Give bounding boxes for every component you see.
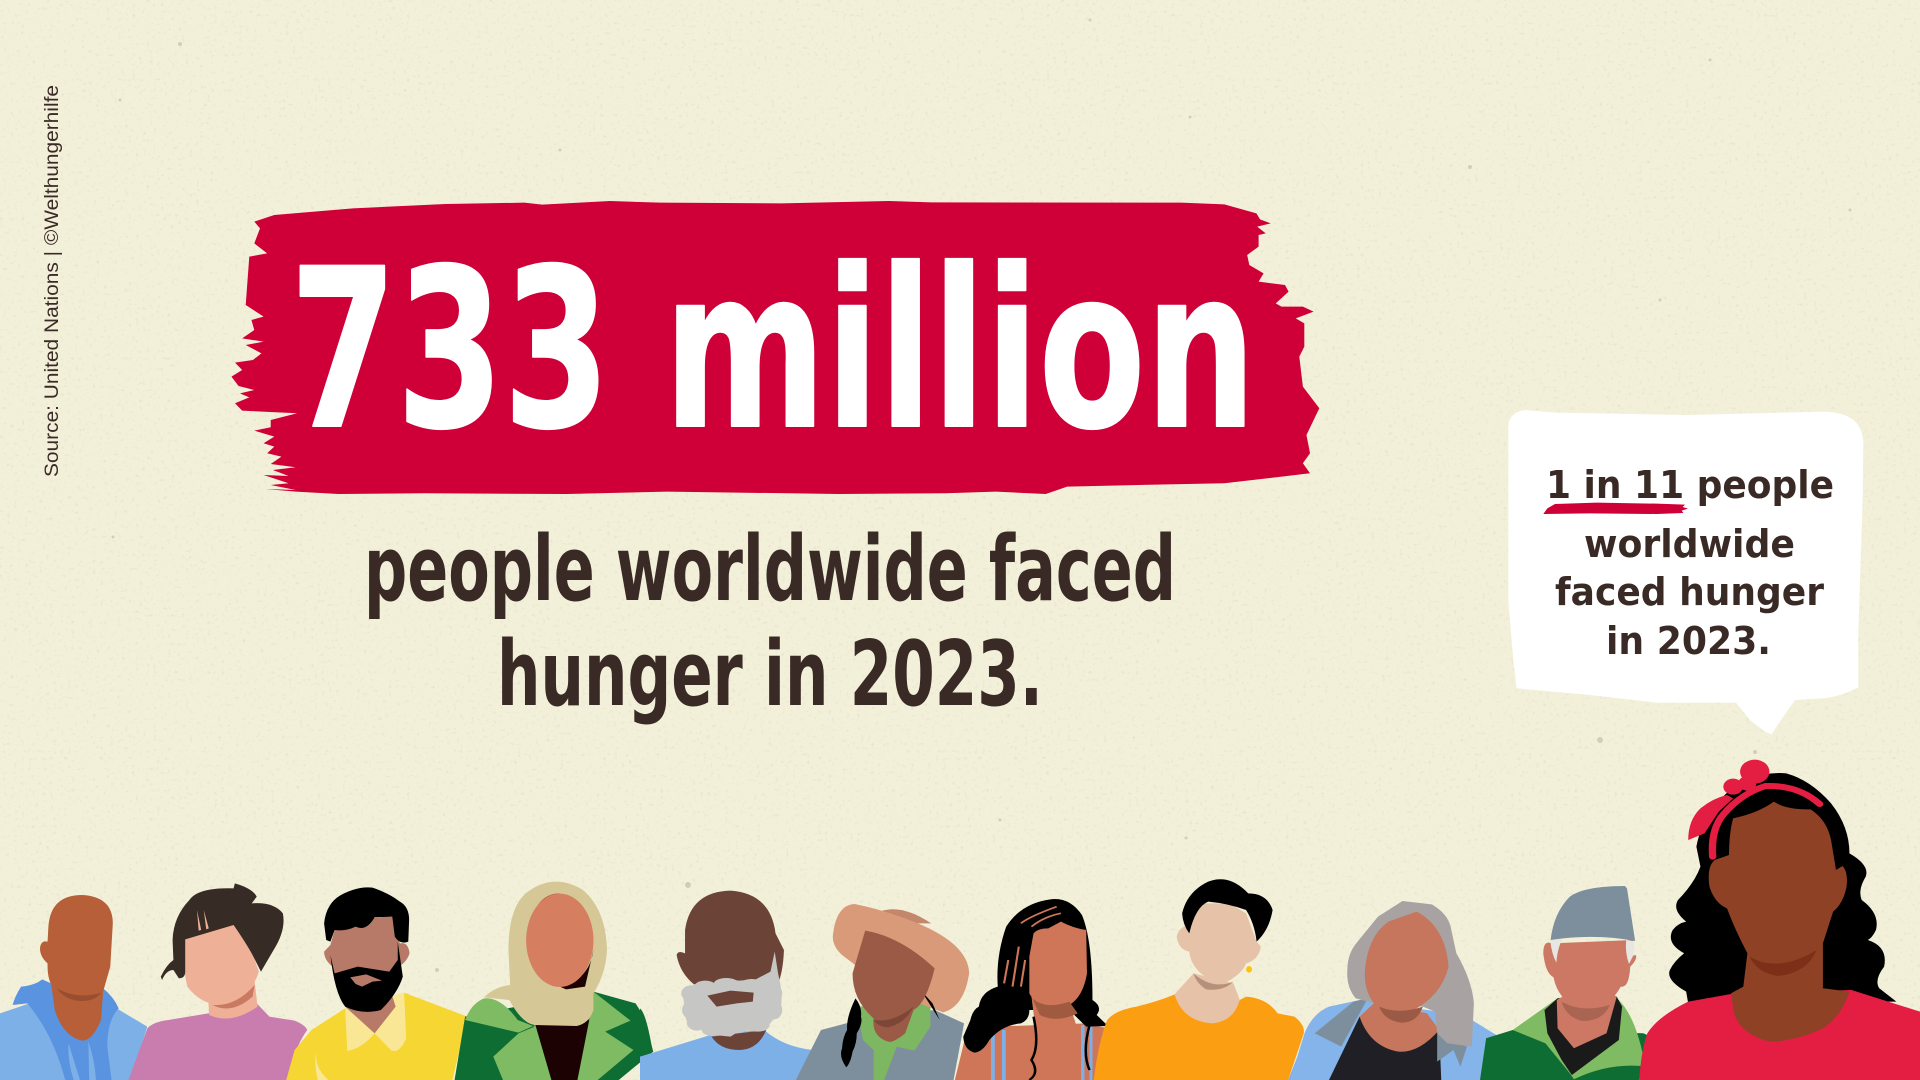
subheading: [364, 517, 1176, 727]
bubble text: worldwide: [1584, 522, 1795, 566]
bubble text: faced hunger: [1555, 570, 1824, 614]
bubble text: in 2023.: [1606, 619, 1771, 663]
person 11: woman with red headband and long black hair: [1639, 760, 1920, 1080]
person 2: woman with short dark hair in pink shirt: [128, 883, 307, 1080]
red brush stroke banner: [231, 201, 1319, 494]
person 9: older woman with long grey hair: [1290, 901, 1496, 1080]
headline number: million: [664, 222, 1256, 478]
people row right: three figures: [1290, 760, 1920, 1080]
bubble text: 1 in 11 people: [1546, 463, 1834, 507]
headline number: 733: [290, 222, 610, 478]
person 3: bearded man in yellow sweater: [286, 887, 467, 1080]
source credit: Source: United Nations | ©Welthungerhilfe: [42, 85, 63, 477]
subheading: hunger in 2023.: [497, 622, 1043, 727]
bubble shape: [1508, 410, 1863, 734]
person 8: person in orange sweatshirt with short black hair: [1094, 879, 1304, 1080]
people row middle: four figures: [640, 879, 1304, 1080]
subheading: people worldwide faced: [364, 517, 1176, 622]
person 6: woman in wide hat and grey shirt: [796, 904, 969, 1080]
red underline stroke: [1543, 503, 1688, 514]
person 7: woman with long braided hair: [955, 899, 1108, 1080]
people row left: four figures: [0, 882, 653, 1080]
person 10: older man in grey cap and green jacket: [1480, 886, 1647, 1080]
person 1: bald man in blue hoodie: [0, 895, 147, 1080]
person 5: bald man with grey beard in blue shirt: [640, 891, 813, 1080]
callout: speech bubble: [1508, 410, 1863, 734]
bubble text: [1546, 463, 1834, 663]
person 4: woman in headscarf and green jacket: [455, 882, 653, 1080]
headline number: [290, 222, 1256, 478]
